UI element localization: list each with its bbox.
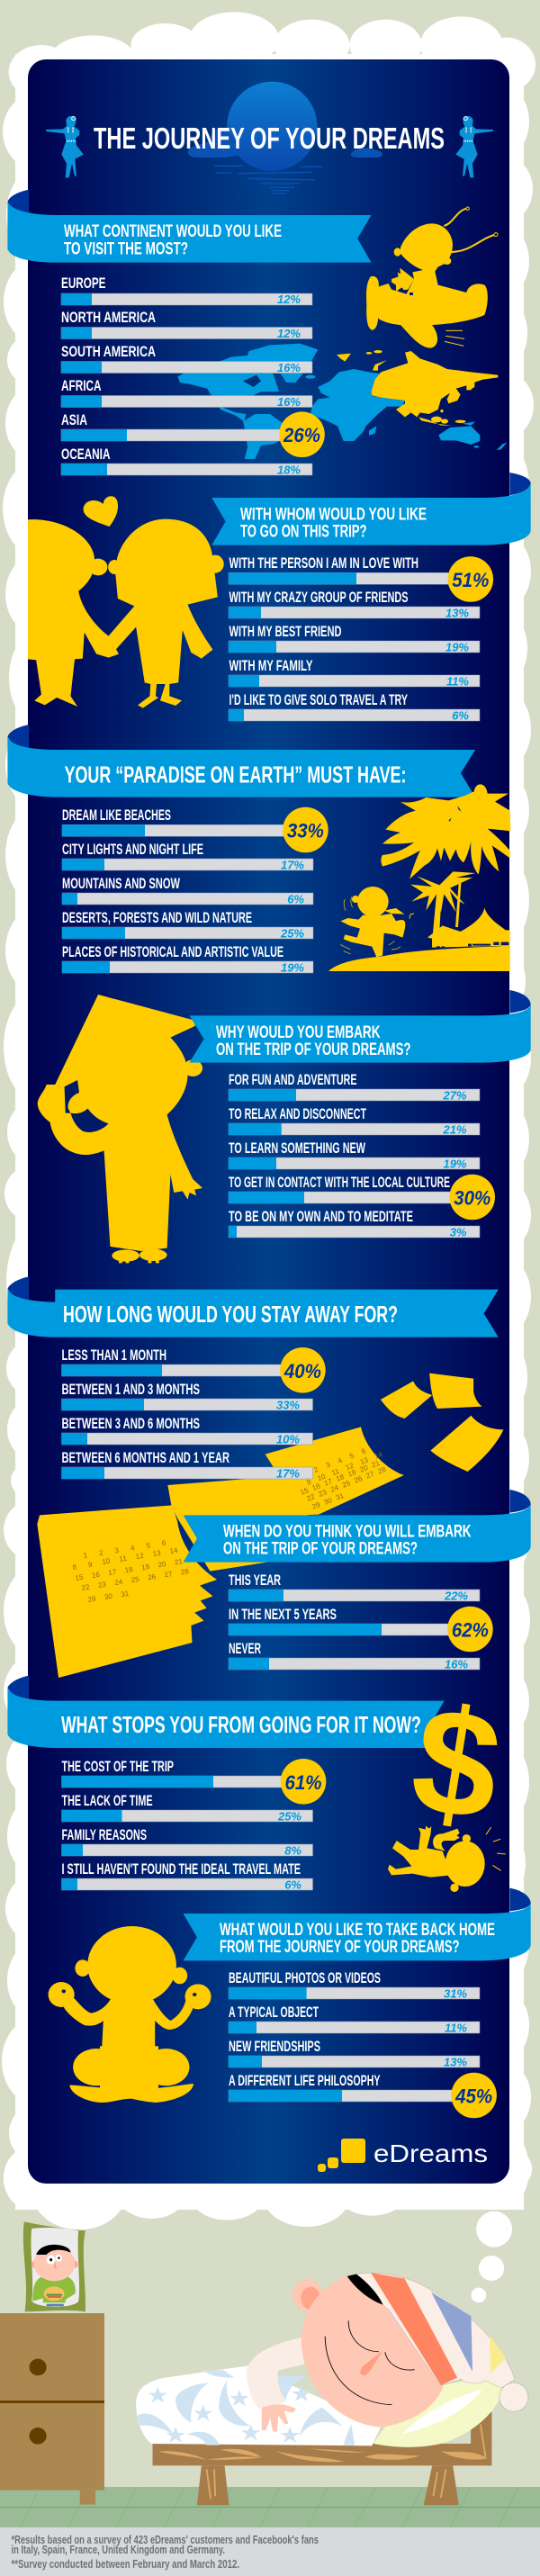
bed frame — [153, 2412, 491, 2505]
bar: 6 months to 1 year 17%: 17% — [276, 1467, 300, 1480]
bar: person in love 51%: 51% — [452, 569, 489, 591]
bar: friendships 13%: 13% — [444, 2056, 467, 2068]
bar: meditate 3% — [229, 1208, 480, 1238]
bar: photos 31% — [229, 1969, 480, 2000]
bar: South America 16%: 16% — [277, 361, 301, 374]
calendar page medium: 9 10 11 12 13 14 — [305, 1450, 384, 1487]
bedside dresser — [0, 2313, 104, 2505]
thought bubbles — [471, 2211, 512, 2302]
footnote text: in Italy, Spain, France, United Kingdom and Germany. — [11, 2544, 225, 2556]
bar: deserts 25%: 25% — [280, 927, 304, 940]
ribbon: with whom — [212, 473, 531, 545]
bar: North America 12%: NORTH AMERICA — [61, 309, 156, 326]
bar: this year 22%: 22% — [444, 1590, 468, 1602]
bar: 6 months to 1 year 17%: BETWEEN 6 MONTHS AND 1 YEAR — [61, 1449, 230, 1466]
bar: relax 21%: 21% — [442, 1123, 467, 1136]
footnote text: *Results based on a survey of 423 eDreams' customers and Facebook's fans — [11, 2534, 319, 2546]
bar: beaches 33%: DREAM LIKE BEACHES — [62, 806, 171, 824]
bar: never 16% — [229, 1640, 480, 1671]
hula dancer right — [455, 116, 493, 177]
ribbon heading: WHAT CONTINENT WOULD YOU LIKE — [64, 221, 282, 241]
calendar page large: 1 2 3 4 5 6 — [83, 1538, 167, 1560]
bar: fun and adventure 27%: 27% — [442, 1089, 467, 1102]
bar: relax 21% — [229, 1105, 480, 1136]
ribbon heading: WHY WOULD YOU EMBARK — [216, 1022, 380, 1042]
sleeping character in bed — [136, 2273, 528, 2505]
bar: historical 19%: 19% — [281, 961, 304, 974]
bar: Oceania 18% — [61, 446, 312, 477]
bar: meditate 3%: 3% — [450, 1226, 467, 1238]
bar: next 5 years 62%: 62% — [452, 1618, 489, 1642]
footnote band — [0, 2527, 540, 2576]
bar: Asia 26% — [61, 411, 325, 457]
calendar page behind ribbon — [167, 1476, 308, 1572]
calendar page large: 8 9 — [72, 1561, 94, 1572]
calendar page medium: 29 30 31 — [310, 1491, 346, 1511]
bar: best friend 19%: WITH MY BEST FRIEND — [229, 623, 342, 640]
ribbon heading — [220, 1920, 495, 1957]
striped nightcap — [347, 2273, 528, 2411]
bar: cost of the trip 61% — [61, 1758, 326, 1805]
calendar page large: 15 16 17 18 19 20 21 — [75, 1557, 184, 1582]
illustration: character with conical hat — [38, 995, 202, 1263]
bar: relax 21%: TO RELAX AND DISCONNECT — [229, 1105, 366, 1122]
bar: local culture 30% — [229, 1174, 495, 1220]
ribbon heading: TO VISIT THE MOST? — [64, 239, 188, 259]
bar: best friend 19% — [229, 623, 480, 653]
bar: Asia 26%: ASIA — [61, 411, 87, 428]
bar: family reasons 8% — [61, 1826, 313, 1858]
ribbon heading — [223, 1521, 472, 1559]
bar: crazy friends 13% — [229, 589, 480, 619]
bar: North America 12% — [61, 309, 312, 340]
bar: Europe 12%: 12% — [277, 293, 301, 306]
calendar page small top right — [429, 1374, 482, 1409]
bar: South America 16%: SOUTH AMERICA — [61, 343, 156, 360]
bar: Africa 16%: 16% — [277, 395, 301, 409]
ribbon heading: WITH WHOM WOULD YOU LIKE — [240, 504, 427, 524]
bar: typical object 11%: A TYPICAL OBJECT — [229, 2004, 319, 2021]
bar: friendships 13%: NEW FRIENDSHIPS — [229, 2038, 320, 2055]
bar: city lights 17% — [62, 841, 313, 871]
calendar page large: 29 30 31 — [87, 1590, 130, 1604]
illustration: character knocked over by the dollar — [388, 1825, 506, 1892]
bar: family reasons 8%: FAMILY REASONS — [61, 1826, 147, 1843]
ribbon heading — [216, 1022, 410, 1059]
bar: best friend 19%: 19% — [446, 641, 469, 653]
illustration: flying calendar pages — [37, 1374, 503, 1678]
bar: family reasons 8%: 8% — [284, 1843, 302, 1858]
bar: mountains 6%: 6% — [287, 893, 304, 905]
bar: Europe 12%: EUROPE — [61, 275, 106, 292]
footnote text: **Survey conducted between February and March 2012. — [11, 2558, 239, 2571]
ribbon: paradise on earth — [7, 725, 475, 797]
bar: lack of time 25%: 25% — [277, 1809, 302, 1824]
bar: travel mate 6% — [61, 1860, 313, 1892]
bar: Oceania 18%: 18% — [277, 463, 301, 477]
ribbon: why embark — [189, 990, 531, 1063]
bar: mountains 6%: MOUNTAINS AND SNOW — [62, 875, 181, 892]
bar: cost of the trip 61%: THE COST OF THE TRIP — [61, 1758, 174, 1775]
moon over the sea — [188, 82, 382, 194]
bar: deserts 25%: DESERTS, FORESTS AND WILD NATURE — [62, 909, 252, 926]
illustration: meditating character — [49, 1926, 212, 2103]
bar: lack of time 25%: THE LACK OF TIME — [61, 1792, 153, 1809]
ribbon heading: ON THE TRIP OF YOUR DREAMS? — [223, 1539, 418, 1559]
bar: crazy friends 13%: WITH MY CRAZY GROUP OF FRIENDS — [229, 589, 409, 606]
sleeve and hand — [247, 2337, 305, 2432]
bar: this year 22%: THIS YEAR — [229, 1572, 281, 1589]
bar: beaches 33% — [62, 806, 328, 852]
bar: historical 19%: PLACES OF HISTORICAL AND ARTISTIC VALUE — [62, 943, 284, 960]
bar: less than 1 month 40% — [61, 1347, 326, 1393]
bar: travel mate 6%: I STILL HAVEN'T FOUND THE IDEAL TRAVEL MATE — [61, 1860, 301, 1878]
bar: Oceania 18%: OCEANIA — [61, 446, 110, 463]
icon: big dollar sign: $ — [401, 1673, 511, 1853]
ribbon heading: TO GO ON THIS TRIP? — [240, 522, 367, 542]
ribbon: what continent — [7, 190, 371, 263]
bar: deserts 25% — [62, 909, 313, 940]
head — [292, 2275, 445, 2427]
ribbon heading: ON THE TRIP OF YOUR DREAMS? — [216, 1040, 410, 1059]
footnote text — [11, 2534, 319, 2571]
bar: 1 to 3 months 33%: BETWEEN 1 AND 3 MONTHS — [61, 1381, 200, 1398]
bar: Africa 16% — [61, 377, 312, 409]
picture frame on the dresser — [23, 2221, 86, 2311]
calendar page small top left — [381, 1381, 432, 1419]
bar: learn 19%: 19% — [443, 1157, 467, 1170]
bar: Asia 26%: 26% — [283, 424, 320, 446]
bar: meditate 3%: TO BE ON MY OWN AND TO MEDITATE — [229, 1208, 413, 1225]
bar: historical 19% — [62, 943, 313, 974]
bar: friendships 13% — [229, 2038, 480, 2068]
bar: this year 22% — [229, 1572, 480, 1602]
bar: 3 to 6 months 10%: 10% — [276, 1433, 300, 1446]
bar: 1 to 3 months 33% — [61, 1381, 313, 1411]
bar: fun and adventure 27% — [229, 1071, 480, 1102]
eDreams logo — [318, 2139, 488, 2172]
bar: 6 months to 1 year 17% — [61, 1449, 313, 1480]
bar: less than 1 month 40%: LESS THAN 1 MONTH — [61, 1347, 166, 1364]
illustration: world map — [177, 344, 507, 459]
bar: learn 19%: TO LEARN SOMETHING NEW — [229, 1139, 366, 1157]
bar: 1 to 3 months 33%: 33% — [276, 1399, 300, 1411]
calendar page medium: 15 16 17 18 19 20 21 — [299, 1459, 382, 1497]
bar: city lights 17%: CITY LIGHTS AND NIGHT LIFE — [62, 841, 203, 858]
bar: never 16%: NEVER — [229, 1640, 261, 1657]
pillow — [374, 2381, 503, 2447]
eDreams logo: eDreams — [374, 2139, 488, 2167]
bar: South America 16% — [61, 343, 312, 374]
bar: fun and adventure 27%: FOR FUN AND ADVENTURE — [229, 1071, 356, 1088]
bar: less than 1 month 40%: 40% — [284, 1360, 321, 1383]
bar: family 11%: 11% — [446, 675, 469, 688]
bar: 3 to 6 months 10%: BETWEEN 3 AND 6 MONTHS — [61, 1415, 200, 1432]
bar: never 16%: 16% — [445, 1658, 468, 1671]
calendar page large: 10 11 12 13 14 — [102, 1546, 179, 1566]
bar: next 5 years 62%: IN THE NEXT 5 YEARS — [229, 1606, 337, 1623]
bar: solo 6%: I'D LIKE TO GIVE SOLO TRAVEL A TRY — [229, 691, 408, 708]
ribbon heading — [240, 504, 427, 542]
bar: travel mate 6%: 6% — [284, 1878, 302, 1892]
bar: cost of the trip 61%: 61% — [284, 1771, 322, 1794]
bar: next 5 years 62% — [229, 1606, 493, 1652]
calendar page medium: 2 3 4 5 6 — [312, 1446, 367, 1474]
ribbon heading — [64, 221, 282, 259]
bar: solo 6% — [229, 691, 480, 722]
calendar page small right — [430, 1416, 503, 1472]
bar: 3 to 6 months 10% — [61, 1415, 313, 1446]
bar: photos 31%: 31% — [444, 1987, 467, 2000]
ribbon: how long — [7, 1276, 499, 1338]
bar: solo 6%: 6% — [452, 709, 469, 722]
bar: photos 31%: BEAUTIFUL PHOTOS OR VIDEOS — [229, 1969, 381, 1986]
bar: family 11%: WITH MY FAMILY — [229, 657, 313, 674]
bar: person in love 51% — [229, 554, 493, 602]
illustration: character flying a plane — [366, 207, 498, 348]
illustration: palm trees, island and character with drink — [328, 784, 510, 971]
ribbon: what stops you — [7, 1676, 445, 1748]
bar: North America 12%: 12% — [277, 327, 301, 340]
bar: city lights 17%: 17% — [281, 859, 304, 871]
illustration: couple holding hands with heart — [28, 496, 224, 708]
bar: Africa 16%: AFRICA — [61, 377, 101, 394]
ribbon heading: HOW LONG WOULD YOU STAY AWAY FOR? — [63, 1301, 398, 1328]
calendar page large — [37, 1505, 217, 1678]
bar: lack of time 25% — [61, 1792, 313, 1824]
bar: mountains 6% — [62, 875, 313, 905]
bar: life philosophy 45%: 45% — [454, 2085, 492, 2108]
icon: heart — [84, 496, 118, 527]
bar: typical object 11%: 11% — [445, 2022, 467, 2034]
blanket — [136, 2365, 381, 2445]
calendar page medium — [266, 1427, 404, 1515]
ribbon: take back home — [184, 1888, 531, 1960]
calendar page medium: 22 23 24 25 26 27 28 — [305, 1465, 388, 1503]
bar: crazy friends 13%: 13% — [446, 607, 469, 619]
bar: family 11% — [229, 657, 480, 688]
bar: person in love 51%: WITH THE PERSON I AM IN LOVE WITH — [229, 554, 418, 572]
floor — [0, 2487, 540, 2527]
ribbon: when embark — [184, 1490, 531, 1563]
bar: life philosophy 45%: A DIFFERENT LIFE PHILOSOPHY — [229, 2072, 381, 2089]
calendar page large: 22 23 24 25 26 27 28 — [81, 1567, 190, 1592]
dark blue panel — [28, 59, 509, 2184]
bar: life philosophy 45% — [229, 2072, 497, 2118]
hula dancer left — [46, 116, 84, 177]
bar: local culture 30%: 30% — [454, 1186, 490, 1210]
bar: Europe 12% — [61, 275, 312, 306]
bar: learn 19% — [229, 1139, 480, 1170]
bar: typical object 11% — [229, 2004, 480, 2034]
bar: beaches 33%: 33% — [287, 819, 324, 842]
